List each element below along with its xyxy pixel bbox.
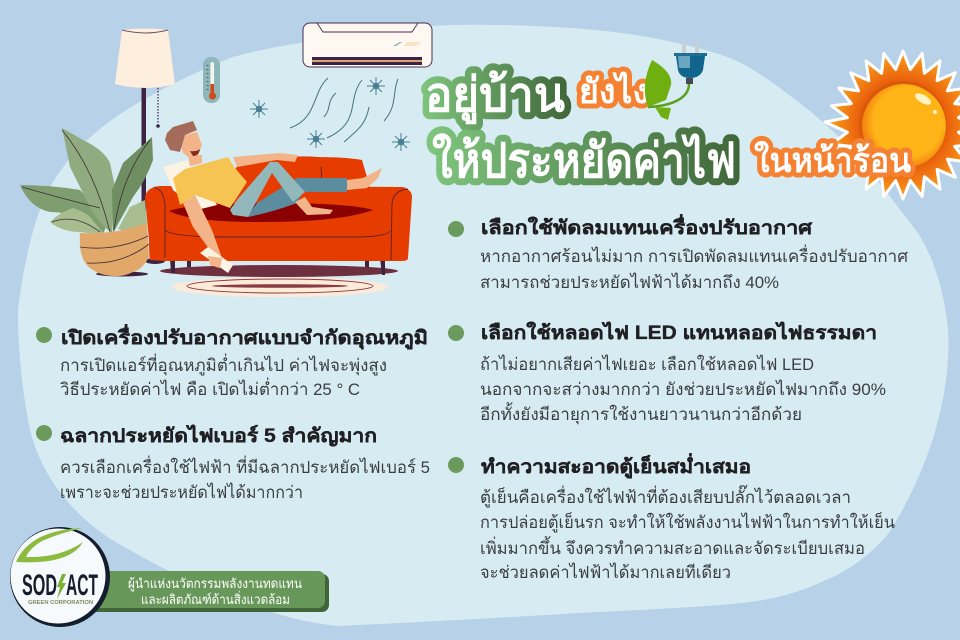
slogan banner: ผู้นำแห่งนวัตกรรมพลังงานทดแทน: [128, 576, 302, 592]
tip: limit air conditioner temperature: การเปิดแอร์ที่อุณหภูมิต่ำเกินไป ค่าไฟจะพุ่งสูง: [60, 353, 387, 376]
title: [425, 69, 911, 188]
icon: plant: [20, 128, 153, 276]
tip: use LED bulbs: ถ้าไม่อยากเสียค่าไฟเยอะ เลือกใช้หลอดไฟ LED: [480, 354, 814, 374]
illustration: room scene: [20, 23, 432, 297]
icon: plug and leaf: [645, 41, 707, 120]
tip: use fan instead of air conditioner: หากอากาศร้อนไม่มาก การเปิดพัดลมแทนเครื่องปรับอากาศ: [480, 244, 908, 266]
icon: relaxing man: [163, 121, 382, 273]
tip: clean the fridge: [448, 453, 895, 582]
tip: energy label number 5: เพราะจะช่วยประหยัดไฟได้มากกว่า: [60, 482, 303, 502]
tip: limit air conditioner temperature: วิธีประหยัดค่าไฟ คือ เปิดไม่ต่ำกว่า 25 ° C: [60, 377, 360, 399]
icon: sun: [825, 51, 960, 199]
tip: energy label number 5: ควรเลือกเครื่องใช้ไฟฟ้า ที่มีฉลากประหยัดไฟเบอร์ 5: [60, 455, 430, 477]
tip: clean the fridge: การปล่อยตู้เย็นรก จะทำให้ใช้พลังงานไฟฟ้าในการทำให้เย็น: [480, 511, 895, 533]
slogan banner: และผลิตภัณฑ์ด้านสิ่งแวดล้อม: [141, 591, 290, 607]
icon: snowflakes: [250, 77, 410, 151]
tip: use LED bulbs: นอกจากจะสว่างมากกว่า ยังช่วยประหยัดไฟมากถึง 90%: [480, 379, 886, 399]
tip: clean the fridge: จะช่วยลดค่าไฟฟ้าได้มากเลยทีเดียว: [480, 562, 731, 582]
tip: use fan instead of air conditioner: สามารถช่วยประหยัดไฟฟ้าได้มากถึง 40%: [480, 272, 779, 292]
logo: SOD ACT: SOD: [22, 569, 57, 602]
tip: energy label number 5: [36, 424, 430, 502]
icon: air conditioner: [303, 23, 432, 67]
logo: SOD ACT: ACT: [66, 569, 98, 602]
icon: rug: [172, 277, 388, 297]
logo: SOD ACT: GREEN CORPORATION: [28, 600, 93, 606]
tip: clean the fridge: ตู้เย็นคือเครื่องใช้ไฟฟ้าที่ต้องเสียบปลั๊กไว้ตลอดเวลา: [480, 484, 851, 508]
tip: limit air conditioner temperature: เปิดเครื่องปรับอากาศแบบจำกัดอุณหภูมิ: [61, 324, 428, 350]
tip: limit air conditioner temperature: [36, 324, 428, 399]
tip: clean the fridge: เพิ่มมากขึ้น จึงควรทำความสะอาดและจัดระเบียบเสมอ: [480, 536, 865, 558]
tip: energy label number 5: ฉลากประหยัดไฟเบอร์ 5 สำคัญมาก: [60, 424, 377, 447]
icon: sofa: [145, 156, 412, 277]
tip: use fan instead of air conditioner: เลือกใช้พัดลมแทนเครื่องปรับอากาศ: [481, 214, 813, 239]
title tag 1: ยังไง: [579, 71, 649, 111]
title line 2: ให้ประหยัดค่าไฟ: [432, 132, 736, 188]
tip: use LED bulbs: อีกทั้งยังมีอายุการใช้งานยาวนานกว่าอีกด้วย: [480, 402, 802, 425]
tip: clean the fridge: ทำความสะอาดตู้เย็นสม่ำเสมอ: [481, 453, 751, 479]
icon: thermometer: [203, 57, 220, 103]
logo: SOD ACT: [10, 527, 110, 627]
title tag 2: ในหน้าร้อน: [754, 140, 911, 180]
tip: use LED bulbs: เลือกใช้หลอดไฟ LED แทนหลอดไฟธรรมดา: [481, 321, 877, 344]
slogan banner: [66, 571, 329, 612]
tip: use fan instead of air conditioner: [448, 214, 908, 292]
icon: floor lamp: [115, 28, 175, 264]
tip: use LED bulbs: [448, 321, 886, 425]
icon: cold air lines: [290, 78, 398, 142]
title line 1: อยู่บ้าน: [425, 69, 565, 125]
